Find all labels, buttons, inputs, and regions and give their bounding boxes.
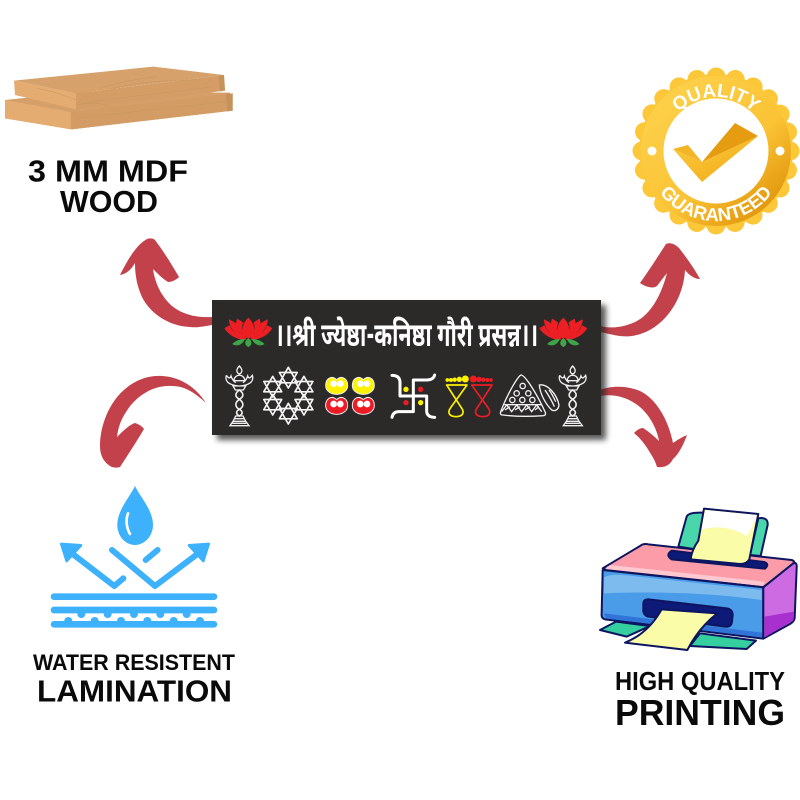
board: nameplate xyxy=(212,300,606,440)
icon: yellow and red kumkum shapes xyxy=(326,378,374,414)
label: lamination: LAMINATION xyxy=(37,674,232,708)
label: lamination xyxy=(33,650,236,708)
label: wood: WOOD xyxy=(60,184,158,219)
arrow: to quality badge xyxy=(600,243,700,336)
icon: goddess footprints xyxy=(445,375,493,417)
icon: left lamp xyxy=(226,366,253,426)
icon: quality badge: GUARANTEED xyxy=(662,187,770,222)
label: printing: PRINTING xyxy=(615,692,785,733)
nameplate text: ।।श्री ज्येष्ठा-कनिष्ठा गौरी प्रसन्न।। xyxy=(275,315,538,360)
icon: star yantra xyxy=(264,367,313,424)
arrow: to printing xyxy=(600,387,687,467)
icon: decorated mound and hand xyxy=(500,375,559,416)
icon: right lotus xyxy=(540,318,587,347)
label: lamination: WATER RESISTENT xyxy=(33,650,236,675)
label: printing: HIGH QUALITY xyxy=(615,666,785,696)
label: wood xyxy=(28,154,188,219)
icon: wood planks xyxy=(5,67,233,129)
arrow: to lamination xyxy=(100,376,206,468)
arrow: to wood xyxy=(120,238,212,327)
icon: left lotus xyxy=(225,318,272,347)
icon: quality badge: QUALITY xyxy=(673,84,762,110)
icon: quality badge xyxy=(632,68,800,234)
icon: swastika xyxy=(392,375,435,417)
icon: right lamp xyxy=(559,366,586,426)
icon: water resistant layers xyxy=(54,486,214,625)
icon: printer xyxy=(600,509,797,650)
label: wood: 3 MM MDF xyxy=(28,154,188,188)
label: printing xyxy=(615,666,785,733)
